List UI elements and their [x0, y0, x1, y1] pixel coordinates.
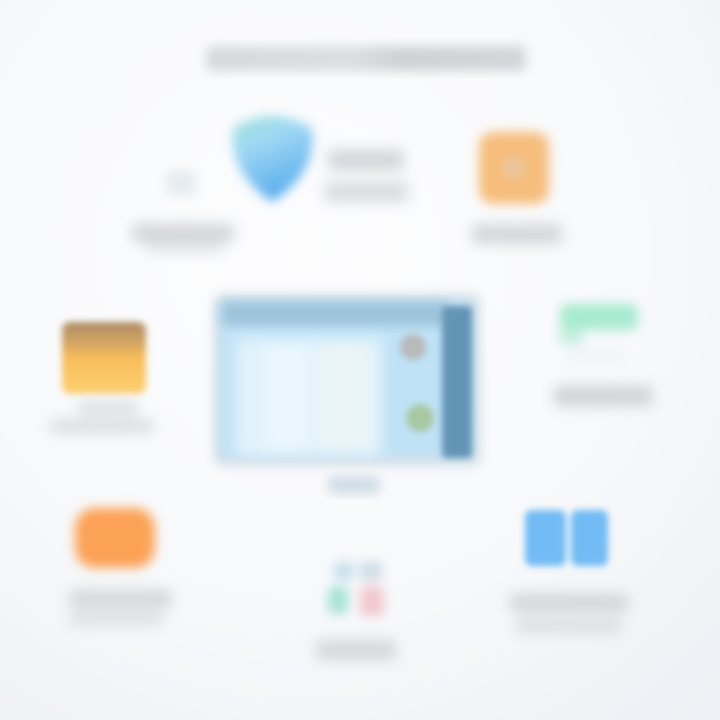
text block: top-left caption, illegible: [132, 224, 234, 252]
text block: shield caption, illegible: [324, 150, 408, 202]
panel: central dashboard window: [214, 294, 480, 494]
title: illegible blurred heading bar: [206, 46, 526, 71]
text block: dashboard caption, illegible: [328, 476, 380, 494]
icon: folder: [62, 322, 146, 394]
content area: [236, 338, 382, 456]
dashboard chip: green: [406, 404, 434, 432]
text block: bottom-left caption, illegible: [70, 590, 172, 625]
icon: orange pill: [75, 508, 155, 568]
panel: bottom-centre item: [316, 562, 396, 660]
icon: green chart: [558, 304, 638, 367]
text block: bottom-centre caption, illegible: [316, 640, 396, 660]
panel: top-right orange item: [472, 132, 562, 244]
icon: orange rounded square: [479, 132, 549, 204]
icon: multicolour nodes: [328, 562, 384, 616]
panel: middle-left folder item: [50, 322, 154, 433]
dashboard chip: muted red: [400, 334, 426, 360]
window body: [220, 302, 472, 456]
icon: faint outline glyph: [166, 170, 196, 196]
text block: bottom-right caption, illegible: [510, 594, 628, 633]
window header: [222, 302, 448, 326]
panel: top-left small item: [132, 170, 234, 252]
window shadow: [214, 294, 480, 466]
text block: folder caption, illegible: [50, 402, 154, 433]
panel: top-centre shield item: [232, 116, 408, 202]
panel: middle-right green item: [554, 304, 652, 406]
icon: shield: [232, 116, 313, 202]
panel: bottom-right blue item: [510, 510, 628, 633]
text block: green item caption, illegible: [554, 386, 652, 406]
dashboard sidebar: [442, 306, 472, 458]
panel: bottom-left orange item: [70, 508, 172, 625]
icon: blue double panel: [525, 510, 608, 566]
text block: orange item caption, illegible: [472, 224, 562, 244]
